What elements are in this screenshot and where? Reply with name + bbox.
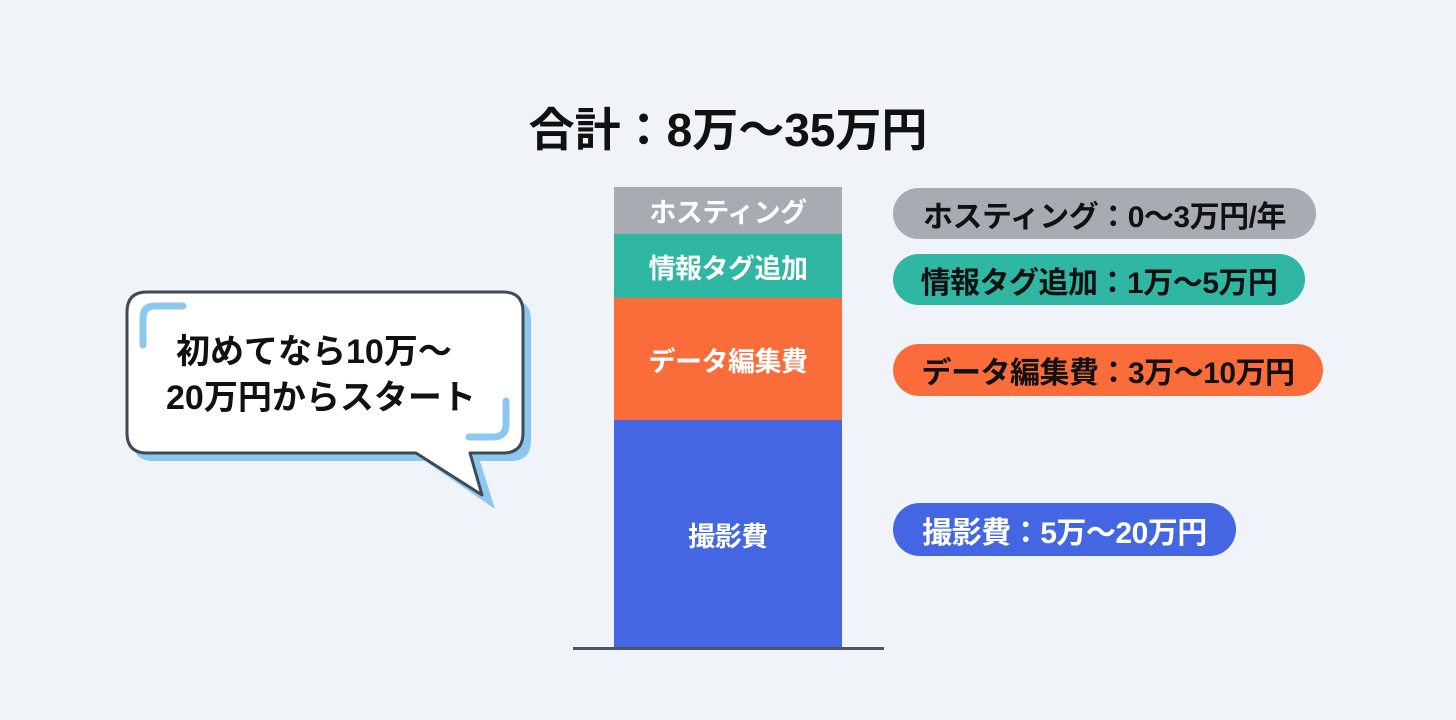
baseline	[573, 647, 884, 650]
pill: info tags: 情報タグ追加：1万〜5万円	[921, 266, 1277, 300]
speech bubble	[126, 290, 531, 509]
bar segment: photography	[614, 420, 842, 648]
bar segment: data editing	[614, 298, 842, 420]
bubble body	[127, 292, 523, 495]
stacked bar chart	[573, 187, 884, 650]
accent corners	[143, 306, 183, 345]
bar segment: photography: 撮影費	[688, 522, 768, 552]
bar segment: hosting	[614, 187, 842, 234]
bar segment: data editing: データ編集費	[648, 346, 808, 376]
bar segment: info tags: 情報タグ追加	[648, 254, 808, 284]
pill: hosting	[893, 188, 1316, 239]
bubble text: 初めてなら10万〜	[176, 333, 452, 371]
pill: info tags	[893, 254, 1305, 305]
bubble shadow	[133, 300, 531, 509]
pill: hosting: ホスティング：0〜3万円/年	[923, 200, 1286, 234]
pill: photography	[893, 503, 1236, 556]
bubble text	[166, 333, 476, 417]
pill: photography: 撮影費：5万〜20万円	[922, 516, 1207, 550]
pill: data editing: データ編集費：3万〜10万円	[921, 357, 1295, 390]
title: 合計：8万〜35万円	[529, 104, 927, 156]
bar segment: hosting: ホスティング	[649, 198, 807, 228]
bubble text: 20万円からスタート	[166, 379, 476, 417]
pill: data editing	[893, 344, 1323, 396]
bar segment: info tags	[614, 234, 842, 298]
